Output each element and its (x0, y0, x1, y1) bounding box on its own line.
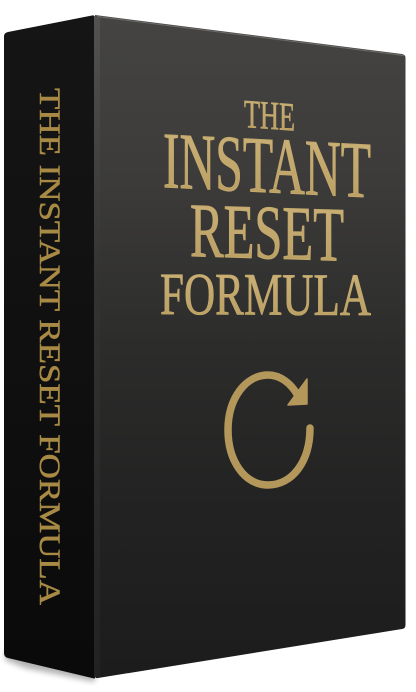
icon: circular reset arrow (228, 375, 310, 485)
cover top edge highlight (97, 16, 404, 56)
spine hinge (94, 17, 100, 677)
drop shadow (5, 650, 95, 682)
spine title: THE INSTANT RESET FORMULA (33, 88, 66, 605)
panel: box spine (4, 15, 95, 678)
title: the: THE (244, 91, 295, 140)
panel: box front cover (94, 15, 406, 678)
